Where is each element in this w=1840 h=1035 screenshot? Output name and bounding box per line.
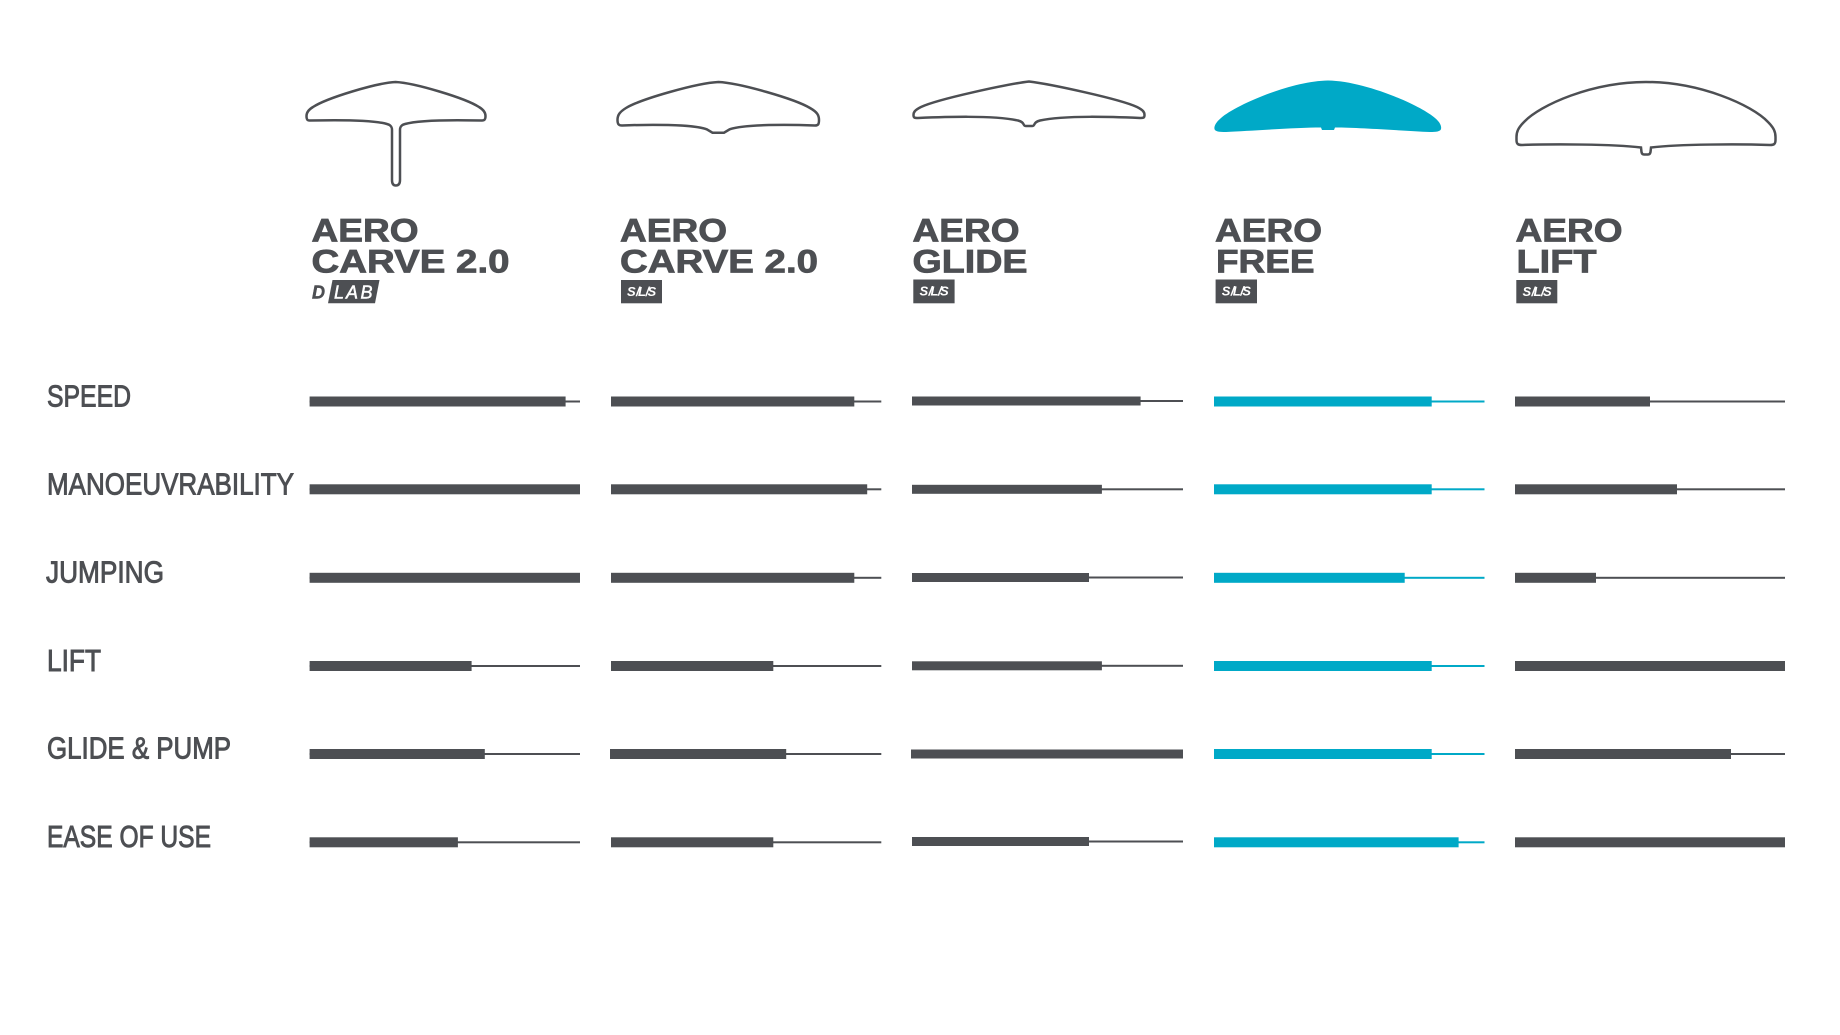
badge: SLS (1216, 280, 1257, 303)
icon: Aero Glide foil (914, 82, 1144, 126)
label: speed: SPEED (47, 378, 131, 414)
bars: speed to ease of use (310, 396, 580, 847)
badge: D LAB: LAB (334, 282, 373, 302)
title: Aero Free: AERO (1215, 212, 1322, 248)
title: Aero Carve 2.0: AERO (620, 212, 727, 248)
title: Aero Carve 2.0: AERO (312, 212, 418, 248)
icon: Aero Carve D-Lab foil with mast (306, 82, 486, 186)
badge: SLS (621, 280, 662, 303)
icon: Aero Free foil, filled blue (1214, 80, 1441, 132)
badge: D LAB: D (312, 282, 325, 302)
row labels (46, 378, 294, 854)
column: Aero Lift SLS (1515, 82, 1785, 847)
label: ease of use: EASE OF USE (47, 819, 211, 854)
column: Aero Glide SLS (911, 82, 1183, 846)
bars: speed to ease of use (610, 396, 881, 847)
badge: SLS: S/L/S (627, 284, 656, 299)
title: Aero Glide: GLIDE (912, 244, 1028, 280)
title: Aero Glide: AERO (912, 212, 1020, 248)
label: manoeuvrability: MANOEUVRABILITY (47, 466, 294, 502)
title: Aero Free: FREE (1216, 244, 1314, 280)
badge: SLS: S/L/S (1222, 284, 1251, 298)
title: Aero Glide (912, 212, 1028, 280)
badge: SLS: S/L/S (920, 284, 949, 298)
badge: SLS (913, 280, 955, 303)
column: Aero Carve 2.0 SLS (610, 82, 881, 847)
title: Aero Lift: LIFT (1516, 244, 1597, 280)
title: Aero Carve 2.0: CARVE 2.0 (620, 244, 818, 280)
bars: speed to ease of use (911, 396, 1183, 846)
column: Aero Carve 2.0 D-Lab (306, 82, 580, 847)
title: Aero Lift (1516, 212, 1622, 280)
column: Aero Free SLS (highlighted) (1214, 80, 1484, 847)
title: Aero Carve 2.0 (312, 212, 510, 280)
badge: SLS (1516, 280, 1557, 303)
title: Aero Free (1215, 212, 1322, 280)
label: glide and pump: GLIDE & PUMP (47, 730, 231, 766)
title: Aero Carve 2.0: CARVE 2.0 (312, 244, 510, 280)
title: Aero Lift: AERO (1516, 212, 1622, 248)
icon: Aero Lift foil (1516, 82, 1776, 154)
icon: Aero Carve foil (618, 82, 819, 133)
title: Aero Carve 2.0 (620, 212, 818, 280)
label: jumping: JUMPING (46, 554, 164, 590)
label: lift: LIFT (47, 643, 101, 678)
badge: SLS: S/L/S (1522, 284, 1552, 299)
bars: speed to ease of use (1515, 396, 1785, 847)
bars: speed to ease of use (1214, 396, 1484, 847)
badge: D LAB (312, 280, 380, 303)
